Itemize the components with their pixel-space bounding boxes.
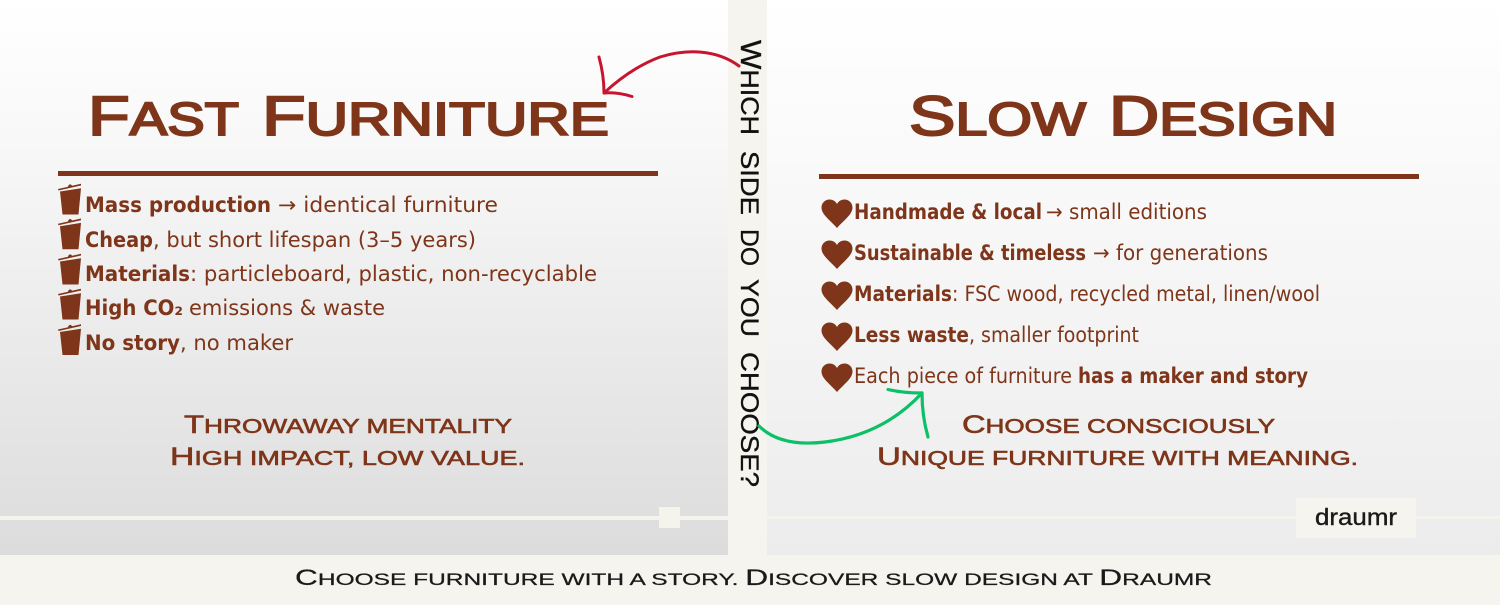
title: Fast Furniture xyxy=(88,84,609,147)
vertical question text: DO xyxy=(735,229,763,266)
divider: right heading rule xyxy=(819,174,1419,179)
icon: heart xyxy=(822,282,852,310)
text: choose consciously conclusion xyxy=(877,411,1358,471)
icon: trash bin xyxy=(58,289,81,320)
center strip xyxy=(728,0,767,555)
item: mass production: Mass production xyxy=(85,193,271,217)
item: less waste: Less waste xyxy=(854,323,969,347)
decorative square marker xyxy=(659,507,680,528)
text: throwaway mentality conclusion: THROWAWAY MENTALITY xyxy=(184,411,512,439)
item: high CO2: emissions & waste xyxy=(189,296,385,320)
item: materials: Materials xyxy=(854,282,952,306)
title: Slow Design xyxy=(909,84,1337,147)
item: high CO2: High CO₂ xyxy=(85,296,183,320)
item: high CO2 xyxy=(58,289,385,320)
text: throwaway mentality conclusion: H IGH IMPACT, LOW VALUE. xyxy=(170,443,525,471)
item: sustainable xyxy=(822,240,1268,269)
item: less waste: , smaller footprint xyxy=(969,323,1139,347)
item: materials: : particleboard, plastic, non-recyclable xyxy=(190,262,597,286)
icon: heart xyxy=(822,200,852,228)
item: maker and story: Each piece of furniture xyxy=(854,364,1072,388)
item: sustainable: → for generations xyxy=(1093,241,1268,265)
panel: fast furniture background xyxy=(0,0,728,555)
item: no story: No story xyxy=(85,331,180,355)
title: Fast Furniture: FURNITURE xyxy=(262,84,609,147)
item: materials xyxy=(822,282,1320,310)
text: choose consciously conclusion: C HOOSE CONSCIOUSLY xyxy=(962,411,1275,439)
item: no story: , no maker xyxy=(180,331,293,355)
list: fast furniture drawbacks xyxy=(58,184,597,355)
item: cheap: , but short lifespan (3–5 years) xyxy=(153,228,476,252)
arrow: green pointing to slow design list xyxy=(759,390,928,443)
item: handmade: → small editions xyxy=(1046,200,1207,224)
vertical question text: W HICH xyxy=(734,40,766,135)
item: mass production xyxy=(58,184,498,217)
item: no story xyxy=(58,324,293,355)
icon: heart xyxy=(822,240,852,269)
icon: heart xyxy=(822,364,852,392)
title: Slow Design: DESIGN xyxy=(1109,84,1337,147)
vertical question text xyxy=(734,40,766,487)
icon: trash bin xyxy=(58,218,81,249)
title: Fast Furniture: FAST xyxy=(88,84,239,147)
item: maker and story: has a maker and story xyxy=(1078,364,1308,388)
arrow: red pointing to fast furniture xyxy=(599,52,739,96)
item: materials: Materials xyxy=(85,262,190,286)
vertical question text: CHOOSE? xyxy=(735,352,763,487)
icon: heart xyxy=(822,322,852,351)
item: cheap: Cheap xyxy=(85,228,153,252)
list: slow design benefits xyxy=(822,200,1320,392)
item: sustainable: Sustainable & timeless xyxy=(854,241,1086,265)
icon: trash bin xyxy=(58,324,81,355)
icon: trash bin xyxy=(58,184,81,214)
logo: draumr: draumr xyxy=(1315,504,1397,530)
item: handmade: Handmade & local xyxy=(854,200,1042,224)
text: choose consciously conclusion: U NIQUE FURNITURE WITH MEANING. xyxy=(877,443,1358,471)
icon: trash bin xyxy=(58,254,81,284)
title: Slow Design: SLOW xyxy=(909,84,1087,147)
text: throwaway mentality conclusion xyxy=(170,411,525,471)
vertical question text: SIDE xyxy=(735,151,763,215)
logo: draumr xyxy=(1296,498,1416,538)
item: maker and story xyxy=(822,364,1308,392)
item: materials xyxy=(58,254,597,286)
item: mass production: → identical furniture xyxy=(278,193,498,217)
bottom banner background xyxy=(0,555,1500,605)
item: handmade xyxy=(822,200,1207,228)
vertical question text: YOU xyxy=(735,279,763,337)
item: cheap xyxy=(58,218,476,252)
bottom banner text: C HOOSE FURNITURE WITH A STORY. D ISCOVER SLOW DESIGN AT D RAUMR xyxy=(295,565,1212,590)
panel: slow design background xyxy=(767,0,1500,555)
item: materials: : FSC wood, recycled metal, linen/wool xyxy=(952,282,1320,306)
item: less waste xyxy=(822,322,1139,351)
divider: left heading rule xyxy=(58,171,658,176)
